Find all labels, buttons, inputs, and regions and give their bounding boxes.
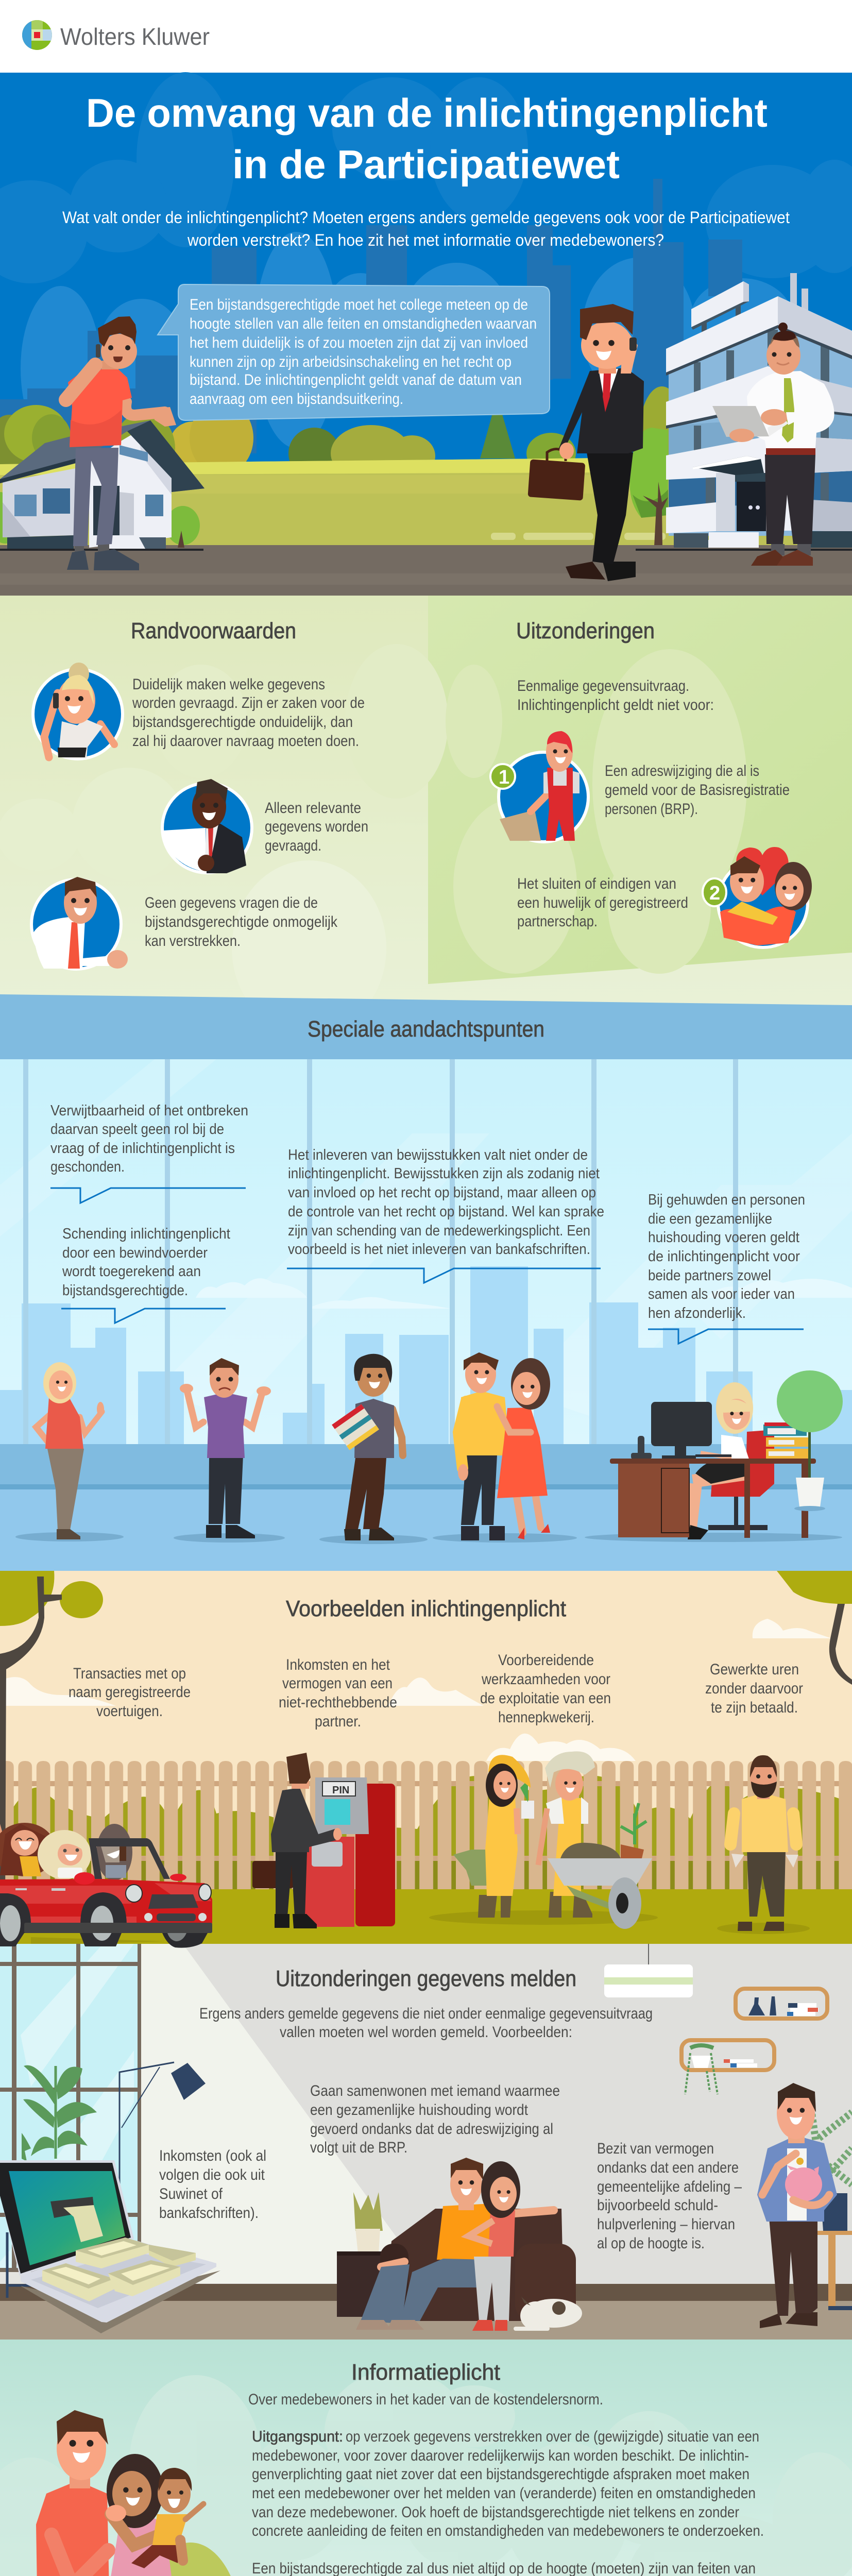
- intro text: [199, 2005, 653, 2041]
- text: inkomsten: [159, 2147, 266, 2222]
- text: hennepkwekerij: de exploitatie van een: [480, 1690, 611, 1707]
- intro text: [62, 208, 790, 249]
- text: uitgangspunt: met een medebewoner over het melden van (veranderde) feiten en omstandigheden: [252, 2485, 756, 2502]
- man with piggy bank: [757, 2083, 852, 2328]
- text: gehuwden: die een gezamenlijke: [648, 1211, 772, 1227]
- text: inkomsten: Suwinet of: [159, 2185, 223, 2202]
- text: gewerkte uren: Gewerkte uren: [710, 1661, 799, 1678]
- text: hennepkwekerij: Voorbereidende: [498, 1652, 594, 1669]
- text: inkomsten: bankafschriften).: [159, 2205, 259, 2222]
- text: gehuwden: Bij gehuwden en personen: [648, 1192, 805, 1208]
- icon: badge 1: [490, 764, 515, 789]
- person: man with laptop: [712, 323, 834, 566]
- text: gehuwden: huishouding voeren geldt: [648, 1229, 799, 1246]
- text: uitgangspunt: [252, 2428, 764, 2539]
- intro text: Ergens anders gemelde gegevens die niet onder eenmalige gegevensuitvraag: [199, 2005, 653, 2022]
- text: verwijtbaarheid: [50, 1103, 248, 1203]
- text: bewijsstukken: zijn van schending van de medewerkingsplicht. Een: [288, 1223, 590, 1239]
- person: blonde woman thumbs up: [36, 1362, 104, 1539]
- text: relevante gegevens: gevraagd.: [265, 837, 321, 854]
- text: vermogen: al op de hoogte is.: [597, 2235, 705, 2252]
- text: bewijsstukken: de controle van het recht op bijstand. Wel kan sprake: [288, 1204, 604, 1220]
- text: gegevens: [132, 676, 365, 750]
- text: transacties: naam geregistreerde: [69, 1684, 191, 1701]
- text: vermogen: [597, 2140, 742, 2252]
- car with friends: [0, 1823, 212, 1948]
- text: schending: wordt toegerekend aan: [62, 1263, 201, 1280]
- text: gewerkte uren: [705, 1661, 803, 1716]
- text: gegevens: worden gevraagd. Zijn er zaken voor de: [132, 694, 365, 711]
- text: bewijsstukken: [287, 1147, 604, 1283]
- text: inkomsten partner: Inkomsten en het: [286, 1656, 390, 1673]
- plant: [22, 2065, 97, 2161]
- text: uitgangspunt: van deze medebewoner. Ook hoeft de bijstandsgerechtigde niet telkens en zonder: [252, 2504, 739, 2521]
- text: huwelijk: partnerschap.: [517, 913, 598, 930]
- panel: hero: [0, 72, 852, 596]
- text: inkomsten partner: [279, 1656, 397, 1730]
- text: hennepkwekerij: hennepkwekerij.: [498, 1709, 594, 1726]
- text: samenwonen: een gezamenlijke huishouding wordt: [310, 2102, 529, 2119]
- text: adreswijziging: [605, 762, 790, 818]
- text: gegevens: zal hij daarover navraag moeten doen.: [132, 733, 359, 750]
- text: vermogen: Bezit van vermogen: [597, 2140, 714, 2157]
- text: huwelijk: [517, 875, 688, 930]
- text: huwelijk: een huwelijk of geregistreerd: [517, 894, 688, 911]
- shelf with plant: [681, 2040, 774, 2094]
- text: vermogen: ondanks dat een andere: [597, 2159, 739, 2176]
- panel: Voorbeelden inlichtingenplicht: [0, 1571, 852, 1944]
- text: gewerkte uren: te zijn betaald.: [711, 1699, 798, 1716]
- text: medebewoners: Over medebewoners in het kader van de kostendelersnorm.: [248, 2391, 603, 2408]
- text: verwijtbaarheid: geschonden.: [50, 1159, 125, 1175]
- person: family father: [27, 2410, 123, 2576]
- text: relevante gegevens: [265, 800, 368, 854]
- speech bubble: hoogte stellen van alle feiten en omstandigheden waarvan: [190, 315, 537, 332]
- heading: Uitzonderingen: Uitzonderingen: [516, 618, 655, 643]
- text: gehuwden: [648, 1192, 805, 1344]
- text: vermogen: bijvoorbeeld schuld-: [597, 2197, 718, 2214]
- ATM with man: PIN: [332, 1785, 349, 1796]
- speech bubble: bijstand. De inlichtingenplicht geldt vanaf de datum van: [190, 371, 522, 388]
- text: eenmalige gegevensuitvraag: [517, 677, 714, 714]
- text: hennepkwekerij: [480, 1652, 611, 1726]
- text: adreswijziging: gemeld voor de Basisregistratie: [605, 782, 790, 799]
- person: man in black suit with briefcase: [527, 304, 644, 581]
- panel: Randvoorwaarden and Uitzonderingen: [0, 596, 852, 1036]
- text: samenwonen: gevoerd ondanks dat de adreswijziging al: [310, 2121, 553, 2138]
- text: uitgangspunt: concrete aanleiding de feiten en omstandigheden van medebewoners te onderzoeken.: [252, 2522, 764, 2539]
- text: schending: bijstandsgerechtigde.: [62, 1282, 188, 1299]
- text: inkomsten partner: vermogen van een: [282, 1675, 393, 1692]
- text: hennepkwekerij: werkzaamheden voor: [481, 1671, 610, 1688]
- speech bubble: kunnen zijn op zijn arbeidsinschakeling en het recht op: [190, 353, 512, 370]
- icon: worker with wheelbarrow: [499, 731, 588, 842]
- text: bewijsstukken: inlichtingenplicht. Bewijsstukken zijn als zodanig niet: [288, 1165, 600, 1182]
- text: verwijtbaarheid: Verwijtbaarheid of het ontbreken: [50, 1103, 248, 1119]
- intro text: vallen moeten wel worden gemeld. Voorbeelden:: [280, 2024, 572, 2041]
- text: inkomsten partner: partner.: [315, 1713, 361, 1730]
- text: gewerkte uren: zonder daarvoor: [705, 1680, 803, 1697]
- text: samenwonen: [310, 2082, 560, 2156]
- text: huwelijk: Het sluiten of eindigen van: [517, 875, 676, 892]
- speech bubble: het hem duidelijk is of zou moeten zijn dat zij van invloed: [190, 334, 528, 351]
- intro text: worden verstrekt? En hoe zit het met informatie over medebewoners?: [187, 231, 664, 249]
- tree right: [777, 1571, 852, 1685]
- icon: badge 2: 2: [709, 883, 720, 904]
- window: [0, 1944, 141, 2284]
- icon: man in suit with paper: [162, 779, 252, 873]
- bushes left: [0, 2543, 270, 2576]
- header bar with logo: [22, 20, 209, 50]
- dog: [514, 2297, 582, 2331]
- intro text: Wat valt onder de inlichtingenplicht? Moeten ergens anders gemelde gegevens ook voor de Participatiewet: [62, 208, 790, 227]
- panel: Uitzonderingen gegevens melden: [0, 1944, 852, 2340]
- text: relevante gegevens: gegevens worden: [265, 818, 368, 835]
- desk with woman and computer: [610, 1370, 843, 1539]
- text: inkomsten partner: niet-rechthebbende: [279, 1694, 397, 1711]
- text: schending: Schending inlichtingenplicht: [62, 1226, 230, 1242]
- pendant lamp: [604, 1944, 693, 1997]
- text: gehuwden: samen als voor ieder van: [648, 1286, 795, 1302]
- road: [0, 545, 852, 596]
- person: couple: [458, 1352, 550, 1540]
- text: gehuwden: hen afzonderlijk.: [648, 1305, 746, 1321]
- speech bubble: [158, 284, 550, 420]
- tree left: [0, 1571, 103, 1906]
- laptop with money: [0, 2160, 220, 2333]
- icon: badge 1: 1: [499, 767, 509, 788]
- text: onmogelijk: Geen gegevens vragen die de: [145, 894, 318, 911]
- panel: Informatieplicht: [0, 2340, 852, 2576]
- text: uitgangspunt: genverplichting gaat niet zover dat een bijstandsgerechtigde afspraken moet maken: [252, 2466, 749, 2483]
- text: vermogen: gemeentelijke afdeling –: [597, 2178, 742, 2195]
- text: transacties: voertuigen.: [96, 1703, 163, 1720]
- ATM with man: [252, 1753, 395, 1928]
- text: onmogelijk: [145, 894, 338, 950]
- text: transacties: Transacties met op: [73, 1665, 186, 1682]
- bubble text: Een bijstandsgerechtigde moet het college meteen op de: [190, 296, 528, 313]
- text: gehuwden: beide partners zowel: [648, 1267, 771, 1284]
- person: man with phone in red shirt: [66, 316, 176, 570]
- logo wordmark: Wolters Kluwer: [60, 23, 210, 50]
- text: uitgangspunt: Uitgangspunt:: [252, 2428, 343, 2445]
- text: vermogen: hulpverlening – hiervan: [597, 2216, 735, 2233]
- title: in de Participatiewet: [232, 142, 620, 187]
- icon: man in white shirt: [31, 877, 128, 969]
- shelf with vases: [736, 1989, 827, 2019]
- office building: [666, 273, 852, 548]
- text: inkomsten: volgen die ook uit: [159, 2166, 265, 2183]
- text: schending: [61, 1226, 230, 1323]
- gardeners with wheelbarrow: [429, 1751, 658, 1929]
- heading: Voorbeelden: Voorbeelden inlichtingenplicht: [286, 1596, 566, 1621]
- ground: [0, 455, 852, 546]
- text: uitgangspunt: op verzoek gegevens verstrekken over de (gewijzigde) situatie van een: [346, 2428, 759, 2445]
- floor lamp: [7, 2062, 206, 2298]
- text: eenmalige gegevensuitvraag: Inlichtingenplicht geldt niet voor:: [517, 697, 714, 714]
- person: man with binders: [332, 1354, 403, 1540]
- text: gegevens: bijstandsgerechtigde onduidelijk, dan: [132, 714, 353, 731]
- text: schending: door een bewindvoerder: [62, 1245, 208, 1261]
- person: family mother and child: [106, 2454, 203, 2576]
- text: verwijtbaarheid: daarvan speelt geen rol bij de: [50, 1121, 224, 1138]
- text: gegevens: Duidelijk maken welke gegevens: [132, 676, 325, 693]
- heading: Randvoorwaarden: Randvoorwaarden: [131, 618, 296, 643]
- text: onmogelijk: kan verstrekken.: [145, 933, 241, 950]
- icon: couple with heart: [718, 847, 812, 947]
- heading: Uitzonderingen gegevens melden: Uitzonderingen gegevens melden: [276, 1966, 576, 1991]
- text: bewijsstukken: voorbeeld is het niet inleveren van bankafschriften.: [288, 1241, 590, 1258]
- text: verwijtbaarheid: vraag of de inlichtingenplicht is: [50, 1140, 235, 1157]
- text: bewijsstukken: van invloed op het recht op bijstand, maar alleen op: [288, 1184, 596, 1201]
- icon: woman with phone: [33, 663, 123, 759]
- text: eenmalige gegevensuitvraag: Eenmalige gegevensuitvraag.: [517, 677, 689, 694]
- text: inkomsten: Inkomsten (ook al: [159, 2147, 266, 2164]
- text: relevante gegevens: Alleen relevante: [265, 800, 361, 817]
- text: uitgangspunt: medebewoner, voor zover daarover redelijkerwijs kan worden beschikt. De inlichtin-: [252, 2447, 749, 2464]
- person: man in purple shrugging: [180, 1358, 271, 1538]
- text: samenwonen: Gaan samenwonen met iemand waarmee: [310, 2082, 560, 2099]
- house: [0, 420, 205, 549]
- text: adreswijziging: personen (BRP).: [605, 801, 698, 818]
- text: gehuwden: de inlichtingenplicht voor: [648, 1248, 800, 1265]
- speech bubble: aanvraag om een bijstandsuitkering.: [190, 391, 403, 408]
- man with empty pockets: [717, 1755, 810, 1934]
- couple on sofa: [337, 2158, 576, 2331]
- text: adreswijziging: Een adreswijziging die al is: [605, 762, 759, 779]
- text: samenwonen: volgt uit de BRP.: [310, 2139, 407, 2156]
- text: bewijsstukken: Het inleveren van bewijsstukken valt niet onder de: [288, 1147, 588, 1163]
- icon: badge 2: [703, 878, 726, 906]
- title: [86, 90, 768, 187]
- bushes: [0, 386, 685, 489]
- icon: Wolters Kluwer logo: [22, 20, 52, 50]
- panel: Speciale aandachtspunten: [0, 994, 852, 1572]
- text: transacties: [69, 1665, 191, 1720]
- tree by office: [629, 428, 668, 546]
- heading: Speciale aandachtspunten: Speciale aandachtspunten: [308, 1016, 544, 1042]
- title: De omvang van de inlichtingenplicht: [86, 90, 768, 135]
- text: onmogelijk: bijstandsgerechtigde onmogelijk: [145, 913, 338, 930]
- heading: Informatieplicht: Informatieplicht: [351, 2360, 500, 2385]
